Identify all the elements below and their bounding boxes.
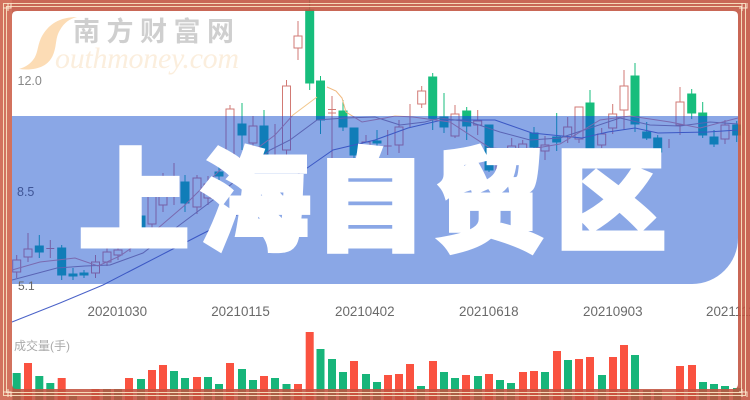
candlestick chart: upper layer xyxy=(12,0,741,322)
volume bars: red xyxy=(24,332,696,400)
axis label 8.5: 8.5 xyxy=(17,185,34,199)
date axis labels: 20210115 xyxy=(211,304,270,319)
axis label 5.1: 5.1 xyxy=(18,279,35,293)
date axis labels: 20210903 xyxy=(583,304,643,319)
watermark Chinese name: 南方财富网 xyxy=(73,16,240,47)
date axis labels: 20210402 xyxy=(335,304,395,319)
volume label: 成交量(手) xyxy=(14,338,70,353)
candlestick chart: tinted layer inside panel xyxy=(12,116,738,284)
watermark domain: outhmoney.com xyxy=(55,42,239,75)
logo letter S xyxy=(19,17,77,69)
volume bars: green xyxy=(13,349,741,400)
title: 上海自贸区 xyxy=(79,142,666,265)
date axis labels xyxy=(88,304,750,319)
date axis labels: 20210618 xyxy=(459,304,519,319)
watermark: southmoney logo xyxy=(19,16,240,75)
price axis labels: 12.0 xyxy=(18,74,42,88)
blue title panel xyxy=(12,116,738,284)
date axis labels: 20201030 xyxy=(88,304,147,319)
